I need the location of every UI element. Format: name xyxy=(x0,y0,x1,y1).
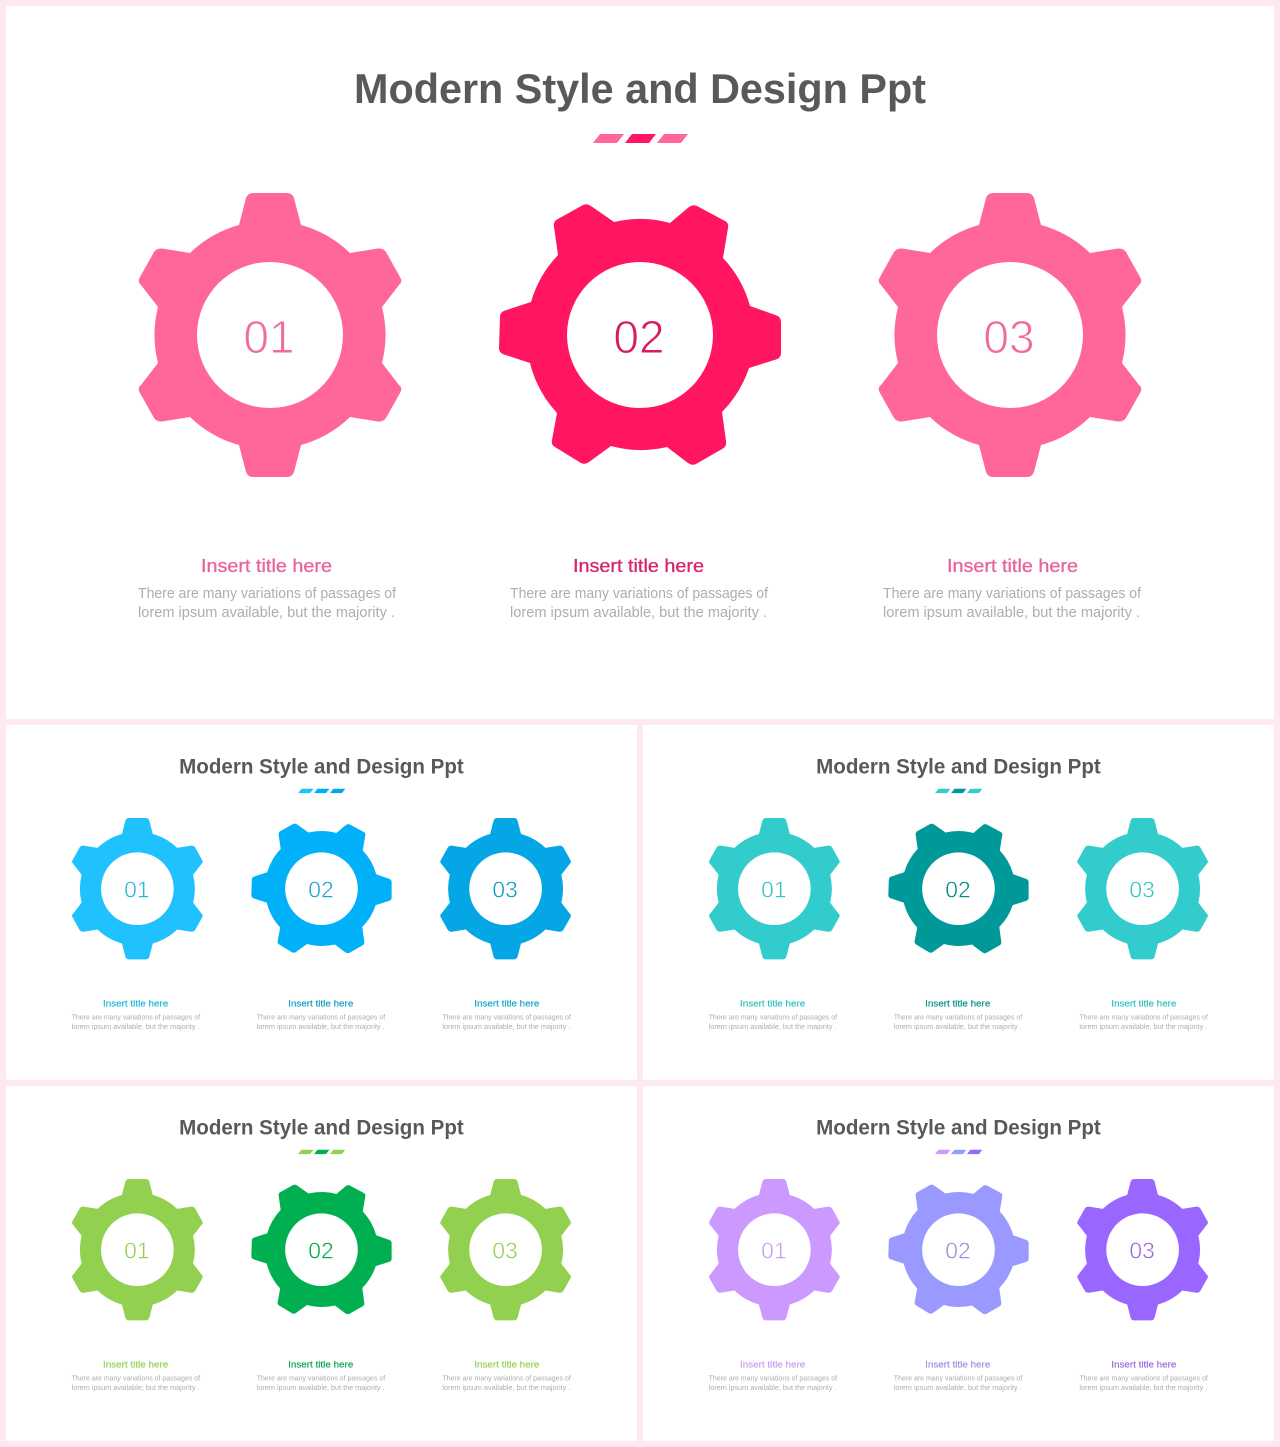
text block 02: Insert title here xyxy=(573,556,704,576)
text block 01 xyxy=(138,556,397,621)
text block 03 xyxy=(1079,1360,1209,1392)
text block 02 xyxy=(257,999,386,1031)
gear 03: 03 xyxy=(492,877,518,903)
title: Modern Style and Design Ppt xyxy=(354,65,926,112)
title accent dashes xyxy=(593,134,688,143)
panel: purple slide xyxy=(643,1086,1274,1441)
text block 02: Insert title here xyxy=(288,999,353,1009)
text block 03 xyxy=(442,1360,572,1392)
gear 01: 01 xyxy=(124,1238,150,1264)
text block 01: lorem ipsum available, but the majority . xyxy=(709,1383,837,1392)
text block 01: Insert title here xyxy=(201,556,332,576)
text block 02: There are many variations of passages of xyxy=(510,586,769,602)
text block 03: There are many variations of passages of xyxy=(883,586,1142,602)
title accent dashes xyxy=(298,1150,345,1154)
gear 01: 01 xyxy=(761,1238,787,1264)
text block 02: lorem ipsum available, but the majority . xyxy=(510,605,767,621)
gear 01 xyxy=(139,193,401,477)
text block 03: lorem ipsum available, but the majority . xyxy=(1079,1022,1207,1031)
gear 02 xyxy=(251,1185,392,1314)
gear 03: 03 xyxy=(1129,877,1155,903)
text block 01 xyxy=(72,999,201,1031)
text block 01: There are many variations of passages of xyxy=(709,1013,838,1022)
text block 02 xyxy=(894,999,1023,1031)
gear 01 xyxy=(72,1179,203,1320)
text block 03: Insert title here xyxy=(474,1360,539,1370)
panel: green slide xyxy=(6,1086,637,1441)
gear 01: 01 xyxy=(761,877,787,903)
text block 01: Insert title here xyxy=(740,1360,805,1370)
text block 02: There are many variations of passages of xyxy=(894,1374,1023,1383)
text block 01: lorem ipsum available, but the majority . xyxy=(72,1383,200,1392)
text block 01: Insert title here xyxy=(103,999,168,1009)
text block 02: lorem ipsum available, but the majority . xyxy=(894,1383,1022,1392)
gear 02 xyxy=(499,204,781,465)
title: Modern Style and Design Ppt xyxy=(179,1116,464,1139)
gear 03 xyxy=(1077,1179,1208,1320)
gear 02: 02 xyxy=(308,1238,334,1264)
text block 03 xyxy=(883,556,1142,621)
text block 03: lorem ipsum available, but the majority . xyxy=(442,1383,570,1392)
text block 01: There are many variations of passages of xyxy=(709,1374,838,1383)
text block 03: There are many variations of passages of xyxy=(1079,1013,1209,1022)
gear 01: 01 xyxy=(243,311,295,363)
panel: blue slide xyxy=(6,725,637,1080)
text block 01 xyxy=(72,1360,201,1392)
title accent dashes xyxy=(935,1150,982,1154)
title: Modern Style and Design Ppt xyxy=(816,1116,1101,1139)
text block 02 xyxy=(257,1360,386,1392)
title: Modern Style and Design Ppt xyxy=(179,755,464,778)
gear 03: 03 xyxy=(492,1238,518,1264)
gear 03: 03 xyxy=(1129,1238,1155,1264)
text block 01: There are many variations of passages of xyxy=(72,1013,201,1022)
title: Modern Style and Design Ppt xyxy=(816,755,1101,778)
text block 03: There are many variations of passages of xyxy=(1079,1374,1209,1383)
gear 02 xyxy=(888,824,1029,953)
gear 03 xyxy=(1077,818,1208,959)
gear 03 xyxy=(879,193,1141,477)
text block 03: lorem ipsum available, but the majority . xyxy=(442,1022,570,1031)
text block 03: Insert title here xyxy=(474,999,539,1009)
title accent dashes xyxy=(298,789,345,793)
gear 01 xyxy=(709,818,840,959)
text block 02 xyxy=(510,556,769,621)
gear 02: 02 xyxy=(945,877,971,903)
text block 02: There are many variations of passages of xyxy=(257,1013,386,1022)
text block 02: lorem ipsum available, but the majority . xyxy=(257,1022,385,1031)
text block 03: lorem ipsum available, but the majority . xyxy=(883,605,1140,621)
text block 03 xyxy=(442,999,572,1031)
text block 02: Insert title here xyxy=(925,999,990,1009)
text block 01: Insert title here xyxy=(740,999,805,1009)
text block 01: Insert title here xyxy=(103,1360,168,1370)
text block 02: There are many variations of passages of xyxy=(894,1013,1023,1022)
text block 02: lorem ipsum available, but the majority . xyxy=(257,1383,385,1392)
text block 02 xyxy=(894,1360,1023,1392)
gear 02 xyxy=(251,824,392,953)
text block 02: Insert title here xyxy=(288,1360,353,1370)
panel: teal slide xyxy=(643,725,1274,1080)
gear 01 xyxy=(709,1179,840,1320)
gear 02: 02 xyxy=(308,877,334,903)
text block 03: Insert title here xyxy=(1111,999,1176,1009)
gear 01 xyxy=(72,818,203,959)
title accent dashes xyxy=(935,789,982,793)
gear 02 xyxy=(888,1185,1029,1314)
text block 01 xyxy=(709,1360,838,1392)
gear 02: 02 xyxy=(945,1238,971,1264)
text block 01: There are many variations of passages of xyxy=(138,586,397,602)
text block 02: There are many variations of passages of xyxy=(257,1374,386,1383)
gear 03 xyxy=(440,1179,571,1320)
text block 03: There are many variations of passages of xyxy=(442,1374,572,1383)
gear 03 xyxy=(440,818,571,959)
text block 03: There are many variations of passages of xyxy=(442,1013,572,1022)
text block 01: lorem ipsum available, but the majority . xyxy=(709,1022,837,1031)
text block 03: Insert title here xyxy=(1111,1360,1176,1370)
text block 03: Insert title here xyxy=(947,556,1078,576)
text block 01: lorem ipsum available, but the majority . xyxy=(138,605,395,621)
panel: pink main slide xyxy=(6,6,1274,719)
gear 03: 03 xyxy=(983,311,1035,363)
gear 01: 01 xyxy=(124,877,150,903)
text block 02: lorem ipsum available, but the majority . xyxy=(894,1022,1022,1031)
text block 01: There are many variations of passages of xyxy=(72,1374,201,1383)
text block 01 xyxy=(709,999,838,1031)
text block 03: lorem ipsum available, but the majority . xyxy=(1079,1383,1207,1392)
text block 03 xyxy=(1079,999,1209,1031)
text block 01: lorem ipsum available, but the majority . xyxy=(72,1022,200,1031)
gear 02: 02 xyxy=(613,311,665,363)
text block 02: Insert title here xyxy=(925,1360,990,1370)
